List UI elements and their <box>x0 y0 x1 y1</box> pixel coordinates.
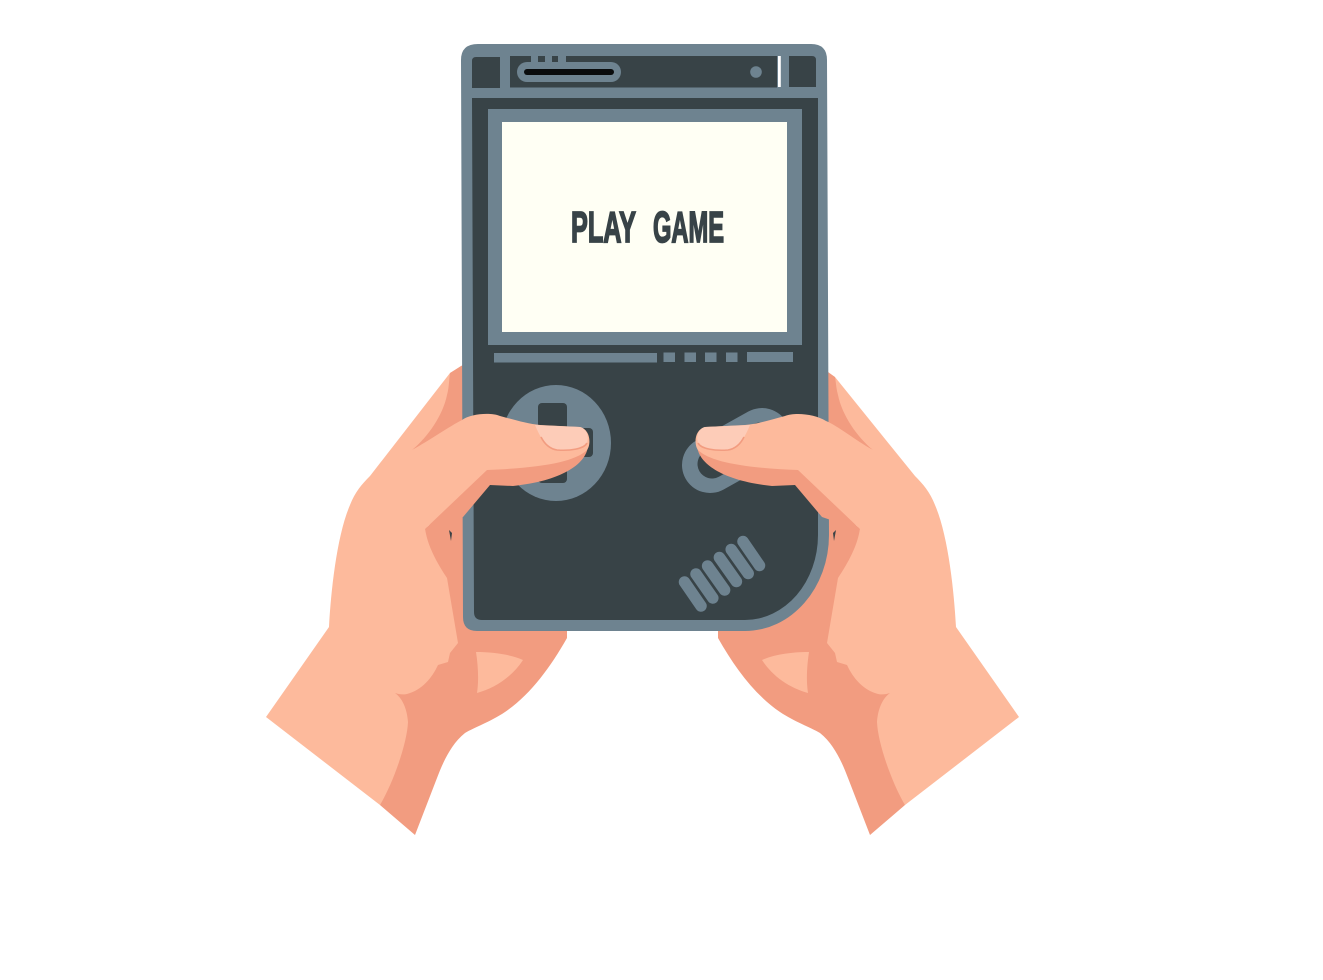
action button <box>710 436 762 465</box>
screen frame <box>488 109 802 345</box>
power indicator dot <box>750 66 762 78</box>
thumbnail rim <box>698 437 744 450</box>
right thumb <box>696 414 890 530</box>
speaker slot <box>517 62 621 82</box>
console lower face <box>472 98 818 620</box>
screen text: play game: GAME <box>653 203 724 252</box>
console body <box>461 44 829 631</box>
top left block <box>472 57 500 88</box>
white highlight line <box>778 56 781 87</box>
thumbnail <box>535 425 588 450</box>
speaker grille <box>684 542 760 606</box>
d-pad <box>501 385 611 501</box>
thumbnail rim <box>541 437 587 450</box>
thumbnail <box>697 425 750 450</box>
top centre panel <box>510 56 777 88</box>
screen <box>502 122 787 332</box>
top notches <box>531 56 566 63</box>
right hand behind console <box>718 365 1019 835</box>
left thumb <box>395 414 589 530</box>
indicator strip <box>494 352 793 362</box>
top right block <box>789 56 816 87</box>
left hand behind console <box>266 362 567 835</box>
screen text: play game: PLAY <box>571 203 636 252</box>
